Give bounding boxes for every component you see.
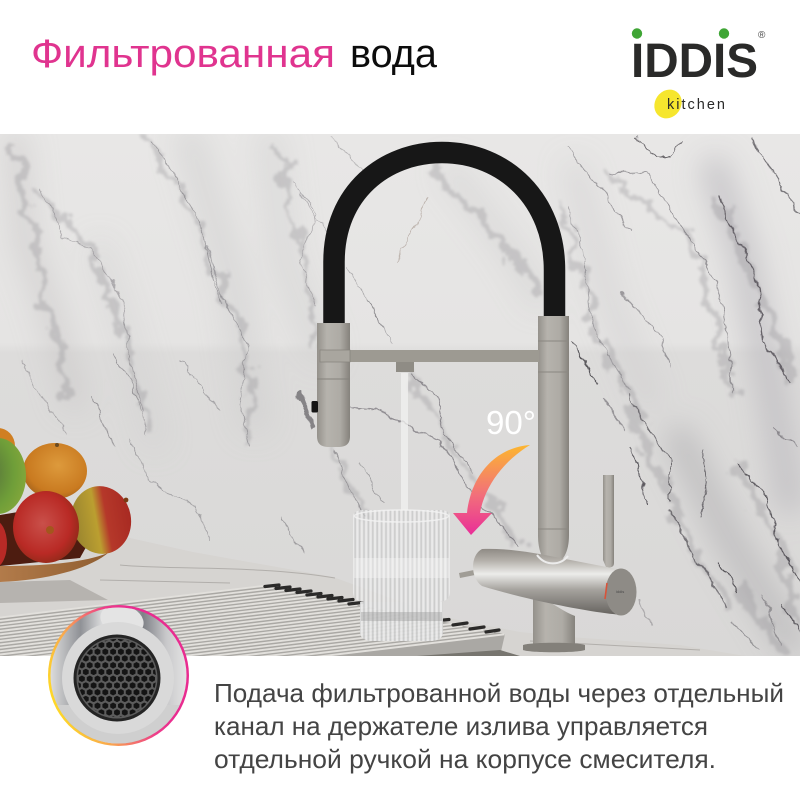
base flange [523, 643, 585, 652]
registered mark: ® [758, 30, 766, 41]
column collar lines [538, 341, 569, 529]
logo wordmark: IDDIS [631, 35, 758, 88]
glass lower dark band [361, 612, 442, 621]
small left lever [459, 568, 485, 578]
faucet [312, 152, 636, 652]
bowl [0, 553, 108, 582]
logo green dot left [632, 28, 642, 39]
spray head joint [320, 350, 350, 362]
countertop [80, 552, 700, 650]
lower chrome band [45, 705, 195, 750]
description text: Подача фильтрованной воды через отдельный [214, 678, 784, 708]
description text [214, 678, 784, 774]
aerator inner rim [74, 634, 160, 722]
bowl shadow on counter [0, 580, 108, 603]
marble wall [0, 134, 800, 656]
callout: aerator close-up [45, 600, 195, 750]
gradient ring [48, 605, 189, 746]
hex mesh plate [76, 638, 158, 718]
glass lower section [360, 602, 443, 641]
faucet column [538, 316, 569, 564]
rack rods [0, 586, 505, 656]
water glass [353, 510, 450, 641]
column shadow on body [537, 555, 568, 563]
title: вода [350, 32, 438, 76]
logo: IDDIS kitchen [631, 28, 766, 124]
logo kitchen word: kitchen [667, 97, 725, 113]
logo yellow blob [649, 84, 687, 124]
glass lower ribs [360, 602, 443, 641]
glass ribs [353, 510, 450, 602]
fruit: left red [0, 522, 7, 566]
base stem [533, 592, 575, 645]
hex mesh holes [78, 639, 156, 717]
dark gap between fruit [0, 510, 90, 566]
handle lever [603, 475, 614, 568]
fruit: top orange [0, 428, 15, 464]
arrow: rotation direction [453, 445, 530, 535]
logo green dot right [719, 28, 729, 39]
glass water tone [354, 558, 449, 578]
aerator interior [45, 600, 195, 750]
marble tonal bands [15, 140, 790, 640]
marble feathered clouds [15, 140, 800, 650]
water stream [401, 373, 408, 510]
dark tray under rack [417, 650, 520, 656]
spray head ring [317, 378, 348, 380]
fruit: red yellow mango [73, 486, 132, 554]
body end cap [606, 568, 636, 616]
vein mark near spray head [298, 393, 313, 428]
marble veins [22, 135, 800, 650]
glass rim [354, 510, 448, 522]
black flexible hose [334, 152, 554, 326]
title: Фильтрованная [31, 32, 335, 76]
upper chrome lobe [97, 600, 147, 640]
fruit: green [0, 438, 26, 514]
body brand mark: iddis [616, 589, 624, 594]
glass upper section [360, 510, 372, 602]
body end cap indicators [605, 583, 607, 599]
description text: отдельной ручкой на корпусе смесителя. [214, 744, 716, 774]
fruit bowl [0, 428, 136, 582]
description text: канал на держателе излива управляется [214, 711, 708, 741]
fruit: orange mango [23, 443, 87, 499]
water outlet [396, 362, 414, 372]
spray button [312, 401, 318, 412]
aerator outer ring [62, 622, 174, 734]
photo: marble kitchen scene [0, 134, 800, 695]
spray head [317, 323, 350, 447]
fruit: red apple [13, 491, 79, 563]
rack black clips near [444, 620, 499, 632]
horizontal spout arm [349, 350, 539, 362]
dish rack [0, 585, 520, 695]
rack black clips far [265, 585, 362, 604]
mixer body [473, 549, 622, 615]
chrome background [50, 608, 186, 744]
icon: 90 degree label: 90° [486, 404, 536, 441]
